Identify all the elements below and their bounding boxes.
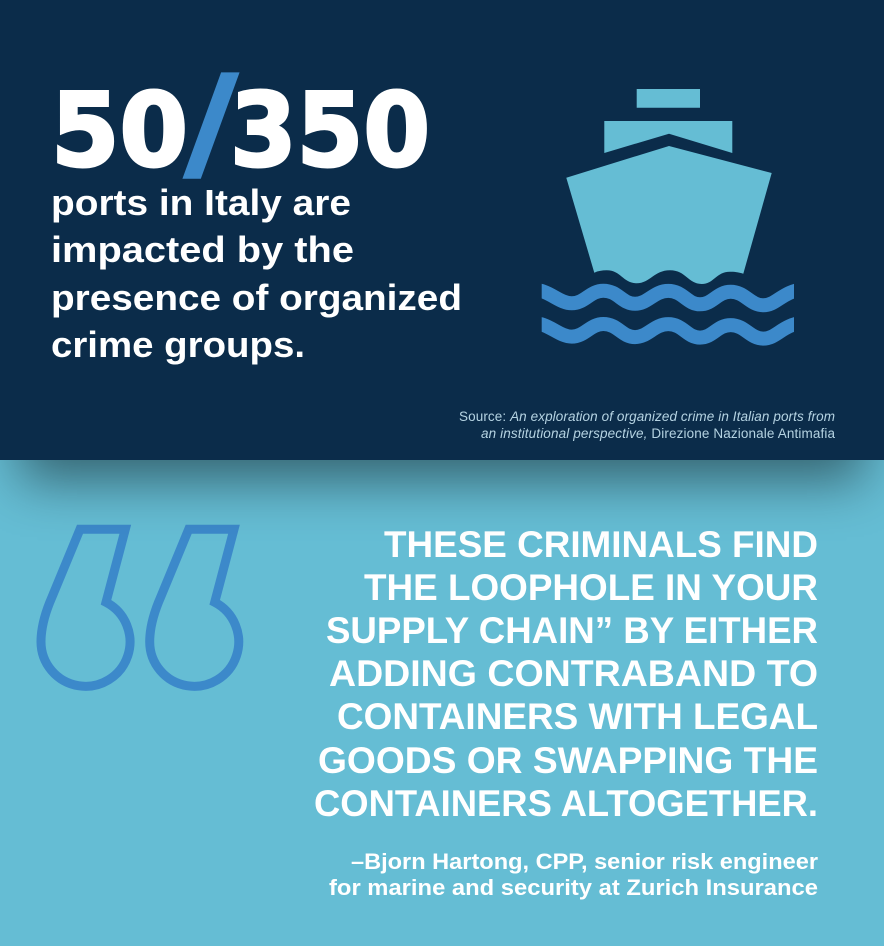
panel: quote <box>0 460 884 946</box>
statistic description: ports in Italy are <box>51 182 351 223</box>
quote text: ADDING CONTRABAND TO <box>329 653 818 694</box>
headline figure 50/350 <box>51 48 430 196</box>
icon: ship on waves <box>530 89 805 339</box>
headline figure 50/350: / <box>184 48 239 196</box>
statistic description <box>51 182 462 365</box>
headline figure 50/350: 350 <box>230 72 430 190</box>
quote text: GOODS OR SWAPPING THE <box>318 740 818 781</box>
source note: Source: An exploration of organized crime in Italian ports from <box>459 409 835 424</box>
quote attribution: for marine and security at Zurich Insurance <box>329 875 818 900</box>
statistic description: impacted by the <box>51 229 354 270</box>
quote text: THE LOOPHOLE IN YOUR <box>364 567 818 608</box>
source note: an institutional perspective, Direzione Nazionale Antimafia <box>481 426 835 441</box>
source note <box>459 409 835 441</box>
quote text <box>314 524 818 824</box>
quote attribution <box>329 849 818 900</box>
quote text: CONTAINERS ALTOGETHER. <box>314 783 818 824</box>
quote text: THESE CRIMINALS FIND <box>384 524 818 565</box>
statistic description: presence of organized <box>51 277 462 318</box>
quote attribution: –Bjorn Hartong, CPP, senior risk engineer <box>351 849 818 874</box>
quote text: CONTAINERS WITH LEGAL <box>337 696 818 737</box>
headline figure 50/350: 50 <box>51 72 188 190</box>
icon: quotation marks <box>41 529 239 686</box>
panel: statistic <box>0 0 884 460</box>
statistic description: crime groups. <box>51 324 305 365</box>
quote text: SUPPLY CHAIN” BY EITHER <box>326 610 818 651</box>
